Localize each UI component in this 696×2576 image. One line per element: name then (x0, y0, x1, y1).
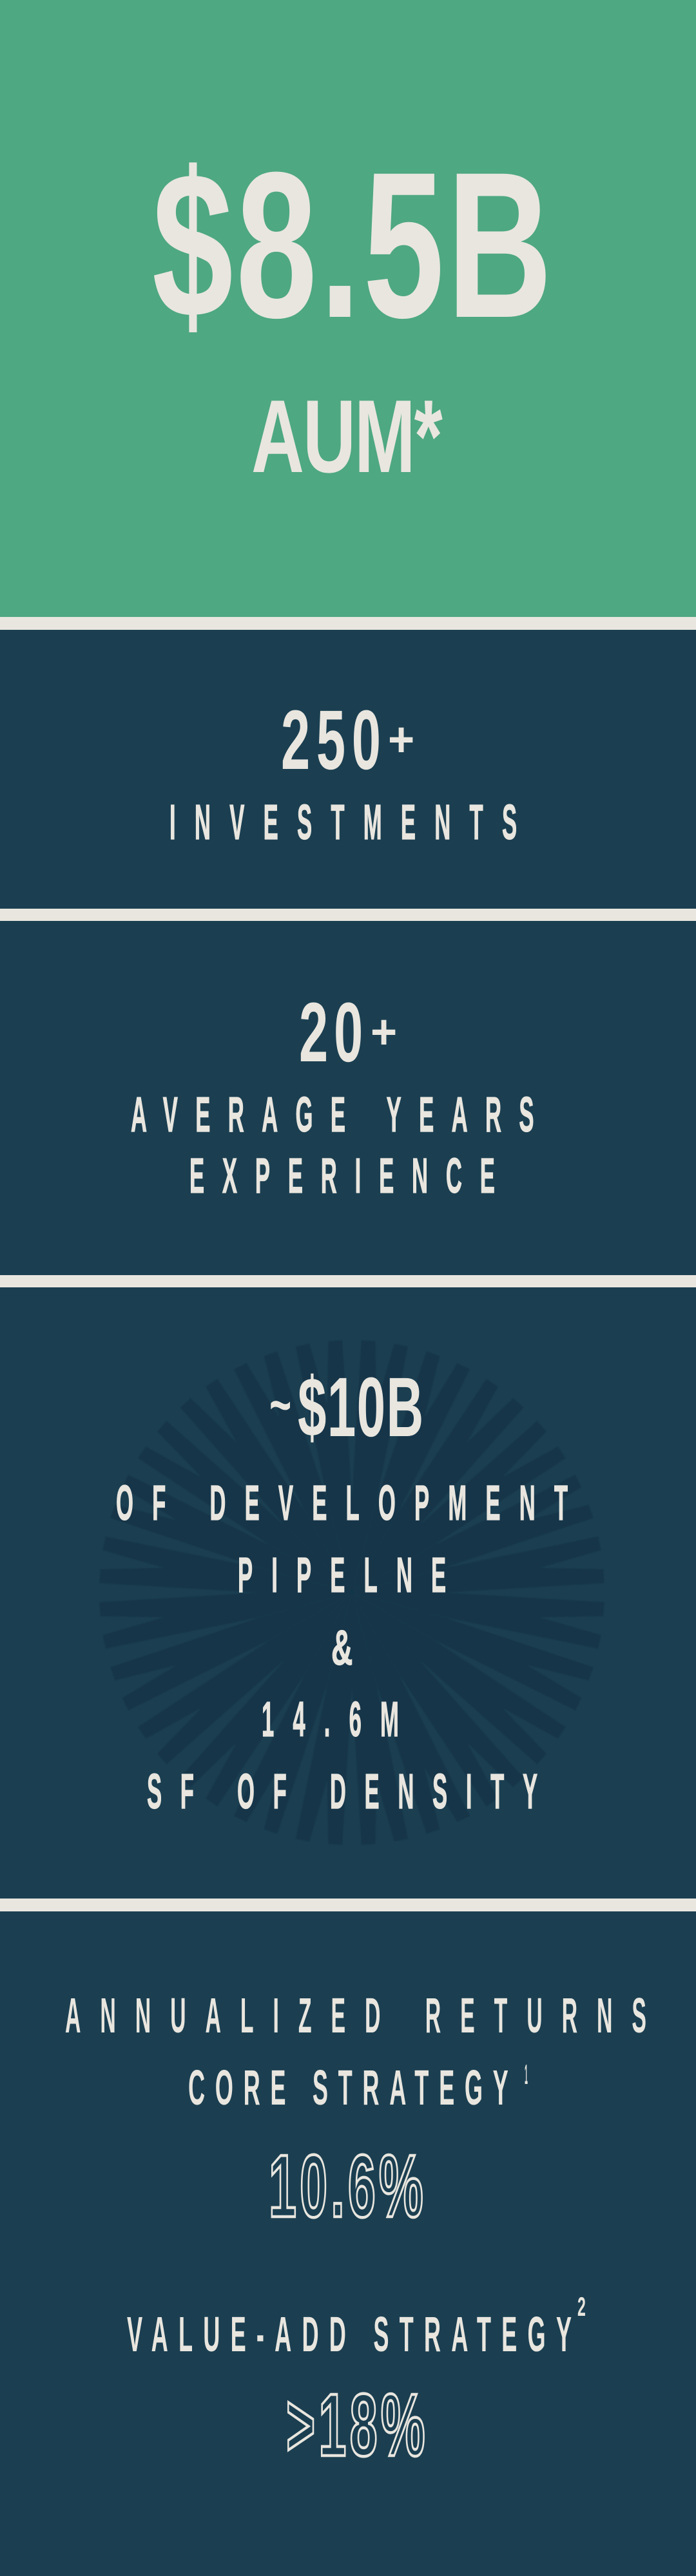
panel: AUM headline (0, 0, 696, 617)
label: investments: INVESTMENTS (169, 794, 517, 850)
label: of development pipeline: OF DEVELOPMENT (116, 1475, 568, 1531)
figure: 10.6%: 10.6% (269, 2136, 423, 2236)
panel: development pipeline and density (0, 1287, 696, 1899)
label: of development pipeline: PIPELNE (238, 1547, 446, 1603)
stat: 250+: + (388, 713, 414, 766)
figure: >18%: >18% (286, 2375, 425, 2475)
stat: ~$10B: ~ (269, 1372, 291, 1437)
label: average years experience: EXPERIENCE (189, 1148, 495, 1204)
heading: annualized returns: ANNUALIZED RETURNS (65, 1987, 646, 2043)
panel: experience (0, 921, 696, 1275)
panel: annualized returns (0, 1911, 696, 2576)
subheading: core strategy: CORE STRATEGY (188, 2060, 508, 2116)
stat: ~$10B: $10B (298, 1360, 423, 1454)
stat: 20+ (299, 985, 397, 1080)
label: average years experience: AVERAGE YEARS (131, 1086, 534, 1142)
panel: investments (0, 630, 696, 909)
stat: 20+: 20 (299, 985, 363, 1080)
stat: 14.6M: 14.6M (262, 1691, 399, 1747)
footnote marker 2: 2 (577, 2292, 586, 2322)
stat: 250+: 250 (281, 693, 381, 788)
label: SF of density: SF OF DENSITY (147, 1763, 537, 1819)
headline figure: $8.5B: $8.5B (152, 129, 552, 362)
label: ampersand: & (331, 1621, 353, 1676)
label: of development pipeline (116, 1475, 568, 1603)
stat: 20+: + (371, 1005, 397, 1059)
label: average years experience (131, 1086, 534, 1204)
subheading: value-add strategy: VALUE-ADD STRATEGY (127, 2307, 572, 2362)
icon: sunburst background (99, 1340, 605, 1846)
headline label: AUM*: AUM* (251, 378, 443, 495)
footnote marker 1: 1 (525, 2058, 528, 2090)
